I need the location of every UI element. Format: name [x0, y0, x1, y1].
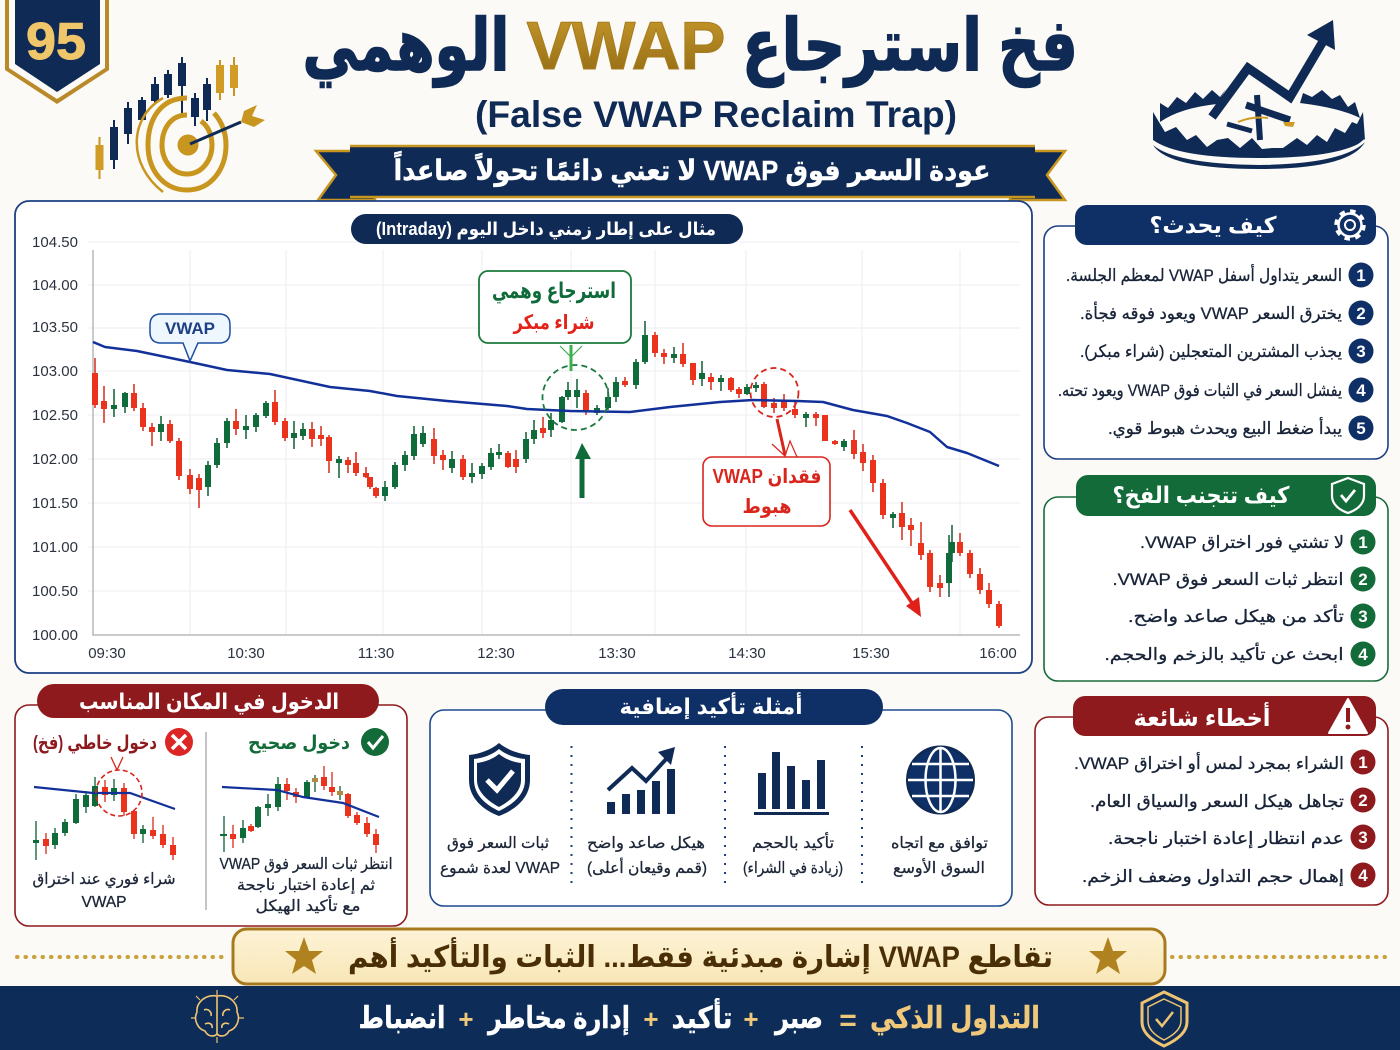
column text: volume: تأكيد بالحجم — [752, 832, 834, 852]
callout: false reclaim: شراء مبكر — [513, 312, 594, 334]
header: how it happens — [1075, 205, 1376, 245]
list: avoid steps: 3 — [1358, 607, 1368, 626]
list: how it happens steps: 5 — [1356, 419, 1366, 438]
list: how it happens steps — [1058, 262, 1374, 440]
icon: red x — [165, 728, 193, 756]
column text: market alignment — [891, 835, 988, 878]
heading: correct entry: دخول صحيح — [248, 733, 350, 754]
text: smart trading equation — [358, 998, 1040, 1037]
list: how it happens steps: يخترق السعر VWAP ويعود فوقه فجأة. — [1080, 301, 1342, 323]
y axis labels: 100.00 — [32, 627, 78, 644]
panel: common mistakes — [1035, 696, 1388, 905]
list: avoid steps: 1 — [1358, 533, 1368, 552]
subtitle: (False VWAP Reclaim Trap) — [475, 94, 957, 135]
title: الوهمي — [302, 6, 510, 88]
y axis labels: 102.50 — [32, 407, 78, 424]
text: smart trading equation: إدارة مخاطر — [486, 1002, 630, 1036]
dashed circle: VWAP loss — [750, 368, 798, 417]
icon: shield check — [1332, 478, 1364, 513]
text: smart trading equation: صبر — [773, 1002, 823, 1035]
mini chart: wrong entry — [33, 757, 176, 860]
icon: green check — [361, 728, 389, 756]
header: extra confirmation: أمثلة تأكيد إضافية — [620, 691, 802, 720]
header: how it happens: كيف يحدث؟ — [1150, 212, 1277, 238]
y axis labels: 103.00 — [32, 363, 78, 380]
icon: candles and target — [96, 57, 265, 192]
callout: VWAP loss: فقدان VWAP — [712, 466, 822, 488]
text: wrong entry description: شراء فوري عند اختراق — [32, 871, 176, 889]
arrow: red down — [850, 510, 921, 617]
column text: holding above VWAP: VWAP لعدة شموع — [440, 860, 560, 878]
column text: structure — [587, 835, 707, 878]
column text: structure: هيكل صاعد واضح — [587, 835, 705, 853]
text: wrong entry description — [32, 871, 176, 911]
text: wrong entry description: VWAP — [82, 894, 126, 911]
text: smart trading equation: انضباط — [358, 1002, 446, 1035]
x axis labels: 11:30 — [358, 645, 394, 662]
list: how it happens steps: 2 — [1356, 304, 1366, 323]
footer bar — [0, 986, 1400, 1050]
x axis labels: 14:30 — [728, 645, 766, 662]
mini chart: correct entry — [220, 766, 379, 853]
chart title pill — [351, 214, 743, 244]
column text: volume — [743, 832, 843, 878]
column text: structure: (قمم وقيعان أعلى) — [587, 857, 707, 878]
chart title pill: مثال على إطار زمني داخل اليوم (Intraday) — [376, 219, 716, 240]
callout: VWAP loss — [703, 457, 830, 526]
arrow: red to callout — [772, 419, 797, 457]
y axis labels: 104.50 — [32, 234, 78, 251]
list: mistakes: تجاهل هيكل السعر والسياق العام. — [1090, 792, 1344, 811]
column text: holding above VWAP — [440, 835, 560, 878]
icon: bear trap with arrow — [1153, 20, 1365, 169]
header: common mistakes — [1073, 696, 1376, 736]
y axis labels: 100.50 — [32, 583, 78, 600]
list: avoid steps: تأكد من هيكل صاعد واضح. — [1128, 604, 1344, 627]
list: avoid steps: ابحث عن تأكيد بالزخم والحجم. — [1104, 642, 1344, 665]
list: how it happens steps: 4 — [1356, 381, 1366, 400]
x axis labels: 16:00 — [979, 645, 1017, 662]
x axis labels: 09:30 — [88, 645, 126, 662]
list: mistakes: 2 — [1358, 791, 1368, 810]
list: mistakes — [1074, 750, 1376, 888]
text: smart trading equation: تأكيد — [672, 998, 732, 1035]
icon: warning triangle — [1329, 699, 1367, 733]
banner: key message: تقاطع VWAP إشارة مبدئية فقط... الثبات والتأكيد أهم — [348, 937, 1053, 975]
text: smart trading equation: + — [458, 1004, 474, 1034]
header: how to avoid — [1076, 475, 1376, 516]
icon: shield check — [469, 743, 530, 816]
column text: market alignment: توافق مع اتجاه — [891, 835, 988, 853]
column text: market alignment: السوق الأوسع — [893, 858, 985, 878]
x axis labels: 13:30 — [598, 645, 636, 662]
list: mistakes: إهمال حجم التداول وضعف الزخم. — [1082, 867, 1344, 887]
icon: shield — [1142, 992, 1187, 1046]
text: correct entry description: ثم إعادة اختبار ناجحة — [237, 877, 375, 894]
dotted line right — [1172, 955, 1386, 959]
dotted line left — [17, 955, 227, 959]
title: فخ استرجاع — [742, 6, 1078, 88]
text: smart trading equation: = — [839, 1004, 857, 1037]
list: how it happens steps: 3 — [1356, 342, 1366, 361]
title: VWAP — [526, 8, 726, 84]
list: mistakes: 3 — [1358, 828, 1368, 847]
list: how it happens steps: يبدأ ضغط البيع ويحدث هبوط قوي. — [1108, 417, 1342, 439]
header: extra confirmation — [545, 689, 883, 725]
dashed circle: reclaim — [542, 365, 608, 430]
y axis labels: 101.00 — [32, 539, 78, 556]
VWAP line — [93, 342, 999, 466]
title — [302, 6, 1078, 88]
icon: brain — [191, 990, 244, 1043]
icon: gear — [1336, 211, 1364, 239]
text: smart trading equation: + — [743, 1004, 759, 1034]
list: mistakes: الشراء بمجرد لمس أو اختراق VWAP. — [1074, 752, 1344, 773]
x axis labels: 10:30 — [227, 645, 265, 662]
icon: volume bars — [754, 752, 829, 815]
text: smart trading equation: التداول الذكي — [870, 1002, 1040, 1036]
list: mistakes: 4 — [1358, 866, 1368, 885]
text: smart trading equation: + — [643, 1004, 659, 1034]
red candles — [92, 332, 1002, 628]
arrow: light green up to callout — [560, 345, 582, 371]
x axis labels: 12:30 — [477, 645, 515, 662]
panel: intraday chart — [15, 201, 1032, 673]
list: avoid steps: 4 — [1358, 645, 1368, 664]
badge: number 95: 95 — [26, 13, 86, 71]
callout: VWAP — [150, 314, 230, 361]
text: correct entry description: انتظر ثبات السعر فوق VWAP — [220, 856, 392, 873]
y axis labels: 101.50 — [32, 495, 78, 512]
list: how it happens steps: 1 — [1356, 266, 1366, 285]
column text: volume: (زيادة في الشراء) — [743, 860, 843, 878]
callout: VWAP loss: هبوط — [742, 496, 792, 518]
callout: false reclaim — [479, 271, 631, 343]
callout: VWAP: VWAP — [165, 319, 215, 338]
list: mistakes: 1 — [1358, 753, 1368, 772]
panel: entry in the right place — [15, 684, 407, 926]
y axis labels: 103.50 — [32, 319, 78, 336]
banner: key message — [233, 929, 1165, 984]
callout: false reclaim: استرجاع وهمي — [492, 278, 616, 304]
y axis labels: 102.00 — [32, 451, 78, 468]
banner: subtitle ribbon: عودة السعر فوق VWAP لا تعني دائمًا تحولاً صاعداً — [393, 150, 990, 187]
list: avoid steps: انتظر ثبات السعر فوق VWAP. — [1112, 570, 1344, 589]
text: correct entry description — [220, 856, 392, 916]
y axis labels: 104.00 — [32, 277, 78, 294]
x axis labels: 15:30 — [852, 645, 890, 662]
x axis labels — [88, 645, 1017, 662]
list: avoid steps: لا تشتي فور اختراق VWAP. — [1140, 533, 1344, 553]
list: avoid steps — [1104, 530, 1376, 666]
header: entry in the right place — [37, 684, 379, 718]
text: correct entry description: مع تأكيد الهيكل — [256, 895, 360, 916]
list: mistakes: عدم انتظار إعادة اختبار ناجحة. — [1108, 829, 1344, 848]
icon: rising bar chart — [607, 747, 675, 814]
icon: globe — [908, 747, 974, 813]
list: avoid steps: 2 — [1358, 570, 1368, 589]
arrow: dark green up — [575, 443, 591, 498]
green candles — [111, 321, 955, 597]
header: how to avoid: كيف تتجنب الفخ؟ — [1112, 482, 1290, 509]
list: how it happens steps: يفشل السعر في الثبات فوق VWAP ويعود تحته. — [1058, 381, 1342, 401]
list: how it happens steps: يجذب المشترين المتعجلين (شراء مبكر). — [1080, 342, 1342, 361]
header: entry in the right place: الدخول في المكان المناسب — [79, 689, 339, 715]
heading: wrong entry: دخول خاطي (فخ) — [33, 733, 157, 754]
list: how it happens steps: السعر يتداول أسفل VWAP لمعظم الجلسة. — [1066, 264, 1342, 286]
panel: extra confirmation examples — [430, 689, 1012, 906]
badge: number 95 — [5, 0, 109, 104]
header: common mistakes: أخطاء شائعة — [1134, 702, 1270, 732]
y axis labels — [32, 234, 78, 644]
banner: subtitle ribbon — [316, 145, 1065, 200]
panel: how it happens — [1044, 205, 1388, 459]
column text: holding above VWAP: ثبات السعر فوق — [447, 835, 549, 852]
panel: how to avoid the trap — [1044, 475, 1388, 681]
